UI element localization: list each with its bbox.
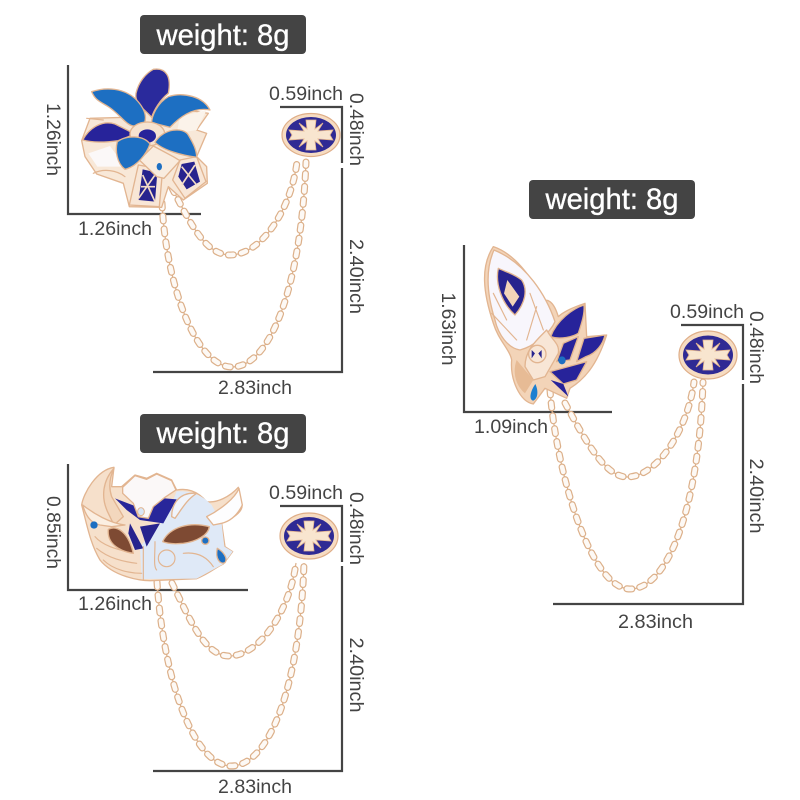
dimension labels: flower: 2.83inch [218, 377, 292, 399]
double chain: flower [162, 162, 306, 367]
icon: star badge, feather [679, 331, 737, 379]
dimension labels: flower: 1.26inch [42, 103, 64, 176]
dimension labels: mask: 0.59inch [269, 482, 343, 504]
dimension labels: feather: 1.09inch [474, 416, 548, 438]
icon: flower enamel pin [82, 69, 210, 207]
weight badge: feather: weight: 8g [545, 183, 678, 216]
weight badge: flower: weight: 8g [156, 19, 290, 52]
dimension labels: feather: 2.83inch [618, 611, 693, 633]
icon: star badge, mask [280, 513, 338, 559]
dimension labels: mask: 2.83inch [218, 776, 292, 798]
panel: mask brooch set [42, 414, 367, 798]
dimension labels: feather: 2.40inch [745, 458, 767, 534]
panel: flower brooch set [42, 15, 367, 399]
dimension labels: feather: 0.59inch [670, 301, 744, 323]
icon: mask enamel pin [82, 467, 242, 581]
dimension labels: mask: 0.48inch [345, 492, 367, 565]
icon: feather and butterfly enamel pin [485, 247, 607, 404]
dimension labels: feather: 0.48inch [745, 311, 767, 384]
dimension lines: feather [464, 245, 743, 604]
dimension lines: mask [68, 464, 342, 771]
double chain: mask [157, 563, 304, 766]
dimension labels: flower [42, 83, 367, 399]
dimension labels: flower: 0.59inch [269, 83, 343, 105]
weight badge: flower [140, 15, 306, 54]
dimension labels: feather: 1.63inch [437, 292, 459, 366]
dimension labels: flower: 2.40inch [345, 239, 367, 314]
panel: feather brooch set [437, 180, 767, 633]
dimension lines: flower [68, 65, 342, 372]
icon: star badge, flower [282, 114, 340, 156]
double chain: feather [550, 382, 703, 589]
dimension labels: mask: 1.26inch [78, 593, 152, 615]
dimension labels: mask: 2.40inch [345, 637, 367, 713]
dimension labels: feather [437, 292, 767, 633]
weight badge: feather [529, 180, 695, 219]
dimension labels: mask [42, 482, 367, 798]
weight badge: mask: weight: 8g [156, 417, 290, 450]
dimension labels: mask: 0.85inch [42, 496, 64, 569]
dimension labels: flower: 1.26inch [78, 218, 152, 240]
weight badge: mask [140, 414, 306, 453]
dimension labels: flower: 0.48inch [345, 93, 367, 166]
